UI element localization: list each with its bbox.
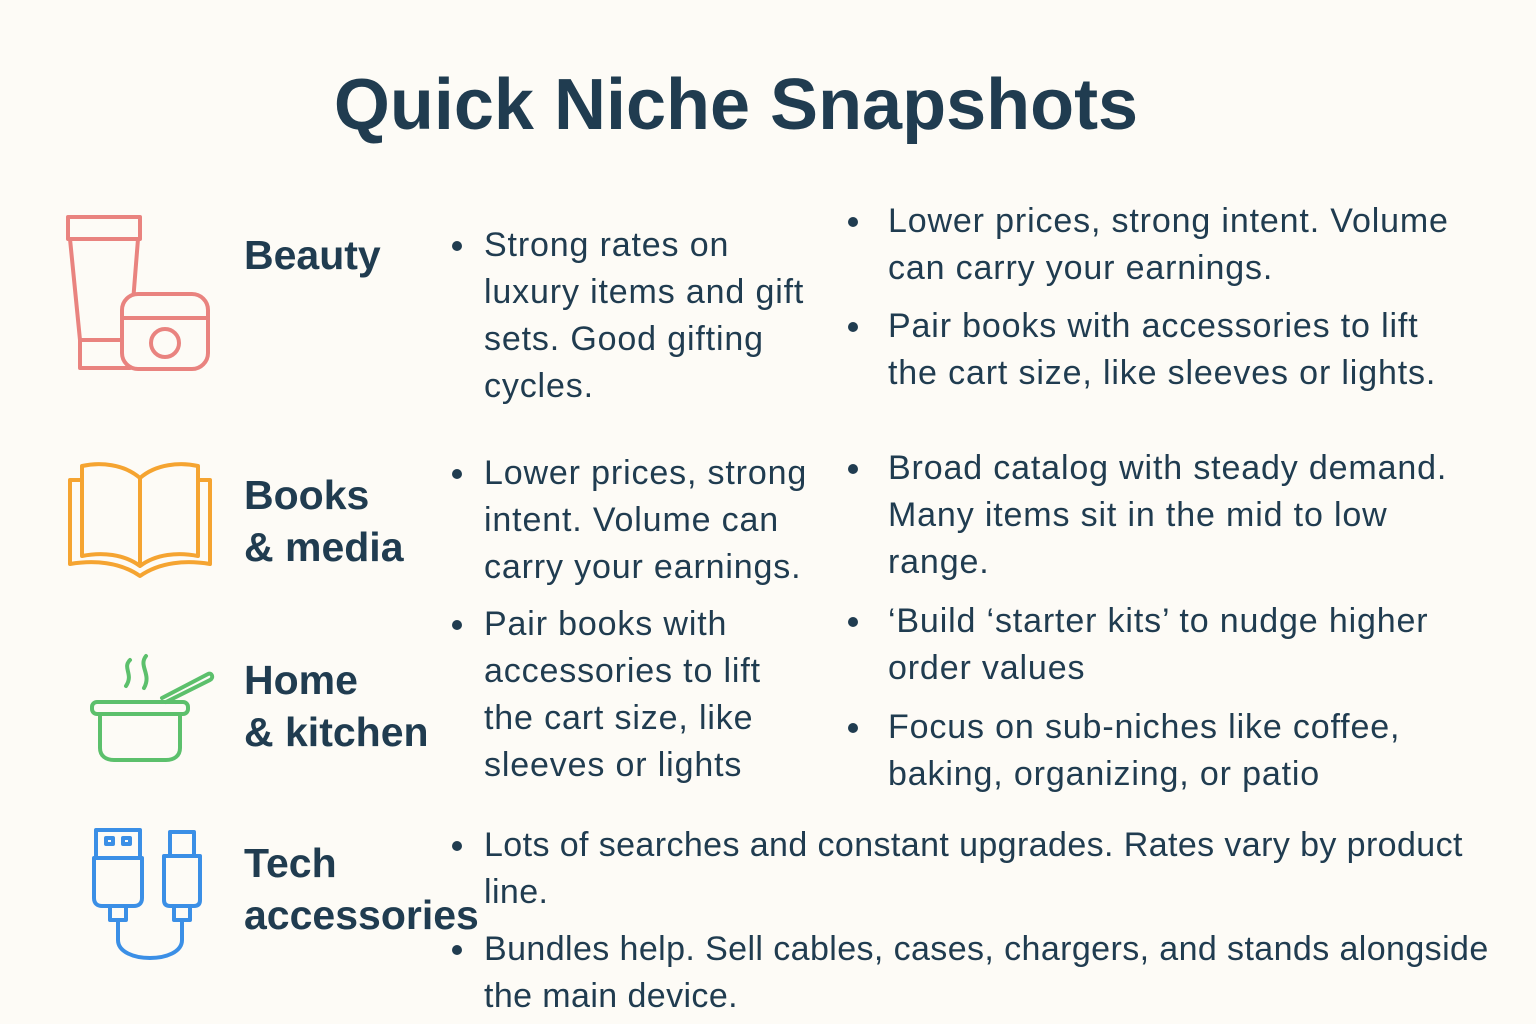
text block: home bullets: Broad catalog with steady demand.: [888, 449, 1447, 487]
title: Quick Niche Snapshots: [334, 65, 1138, 145]
heading: Home & kitchen: & kitchen: [244, 709, 429, 755]
heading: Tech accessories: Tech: [244, 840, 337, 886]
text block: books bullets: sleeves or lights: [484, 746, 742, 784]
heading: Books & media: Books: [244, 472, 369, 518]
text block: books bullets: accessories to lift: [484, 652, 761, 690]
text block: right column top: [848, 202, 1449, 392]
text block: tech bullets: [452, 826, 1489, 1015]
text block: home bullets: baking, organizing, or patio: [888, 755, 1320, 793]
text block: home bullets: ‘Build ‘starter kits’ to nudge higher: [888, 602, 1428, 640]
heading: Tech accessories: [244, 840, 479, 938]
text block: beauty bullets: luxury items and gift: [484, 273, 804, 311]
text block: books bullets: carry your earnings.: [484, 548, 801, 586]
text block: tech bullets: Lots of searches and constant upgrades. Rates vary by product: [484, 826, 1463, 864]
text block: books bullets: Lower prices, strong: [484, 454, 807, 492]
text block: home bullets: [848, 449, 1447, 793]
heading: Home & kitchen: [244, 657, 429, 755]
text block: home bullets: order values: [888, 649, 1085, 687]
text block: books bullets: the cart size, like: [484, 699, 753, 737]
icon: beauty tube and jar: [66, 215, 210, 371]
text block: books bullets: Pair books with: [484, 605, 727, 643]
text block: home bullets: range.: [888, 543, 990, 581]
text block: right column top: Pair books with accessories to lift: [888, 307, 1419, 345]
heading: Home & kitchen: Home: [244, 657, 358, 703]
text block: home bullets: Many items sit in the mid to low: [888, 496, 1388, 534]
text block: tech bullets: Bundles help. Sell cables, cases, chargers, and stands alongside: [484, 930, 1489, 968]
text block: beauty bullets: Strong rates on: [484, 226, 729, 264]
text block: beauty bullets: cycles.: [484, 367, 594, 405]
text block: tech bullets: line.: [484, 873, 548, 911]
text block: beauty bullets: [452, 226, 804, 405]
heading: Books & media: & media: [244, 524, 404, 570]
text block: right column top: can carry your earnings.: [888, 249, 1273, 287]
icon: usb cable: [92, 828, 202, 960]
text block: right column top: Lower prices, strong intent. Volume: [888, 202, 1449, 240]
icon: open book: [68, 462, 212, 578]
text block: books bullets: intent. Volume can: [484, 501, 779, 539]
heading: Books & media: [244, 472, 404, 570]
text block: books bullets: [452, 454, 807, 784]
text block: beauty bullets: sets. Good gifting: [484, 320, 764, 358]
heading: Beauty: Beauty: [244, 232, 381, 278]
text block: tech bullets: the main device.: [484, 977, 738, 1015]
icon: pot: [90, 654, 214, 762]
text block: home bullets: Focus on sub-niches like coffee,: [888, 708, 1400, 746]
text block: right column top: the cart size, like sleeves or lights.: [888, 354, 1436, 392]
heading: Tech accessories: accessories: [244, 892, 479, 938]
